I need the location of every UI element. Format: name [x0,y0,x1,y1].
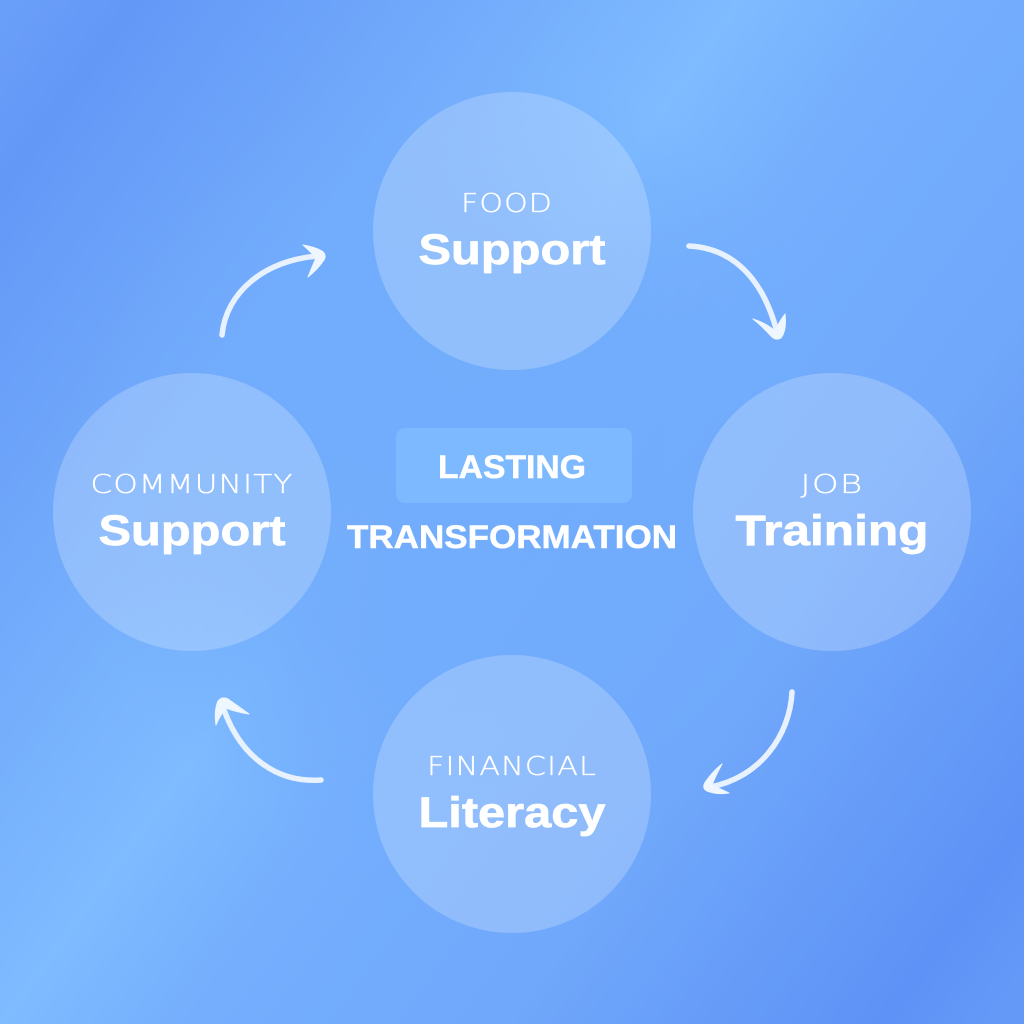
node: job training [693,373,971,651]
node: financial literacy [373,655,651,933]
node: job training: Training [736,507,928,555]
node: community support: Support [98,507,286,555]
arrow: job to financial [704,692,792,794]
center label: lasting transformation: TRANSFORMATION [347,519,677,555]
arrow: food to job [689,246,786,339]
node: community support: COMMUNITY [90,470,294,500]
node: food support: FOOD [461,189,553,219]
node: financial literacy: FINANCIAL [427,752,597,782]
node: food support: Support [418,226,606,274]
node: food support [373,92,651,370]
node: job training: JOB [800,470,864,500]
node: financial literacy: Literacy [418,789,606,837]
arrow: financial to community [215,698,321,780]
node: community support [53,373,331,651]
center label: lasting transformation: LASTING [438,449,586,485]
arrow: community to food [222,245,325,335]
center label: lasting transformation [347,428,677,555]
